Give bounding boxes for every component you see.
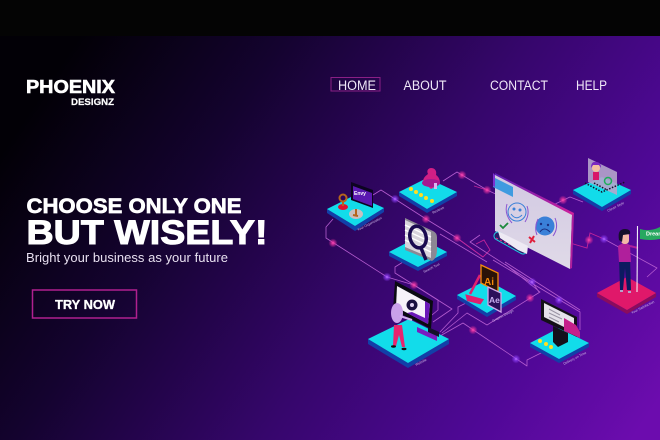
glowing nodes bbox=[328, 170, 608, 364]
icon: sad face bbox=[536, 216, 557, 236]
headline: BUT WISELY! bbox=[26, 214, 268, 252]
logo bbox=[26, 77, 115, 108]
platform: reviews bbox=[399, 168, 457, 215]
platform: clever style bbox=[573, 158, 631, 213]
try now button: TRY NOW bbox=[55, 297, 116, 312]
icon: happy face bbox=[506, 203, 528, 223]
icon: magnifier card bbox=[405, 218, 437, 261]
panel top edge bbox=[495, 173, 574, 217]
icon: delivery monitor bbox=[541, 299, 577, 347]
top black bar bbox=[0, 0, 660, 36]
logo: PHOENIX bbox=[26, 77, 115, 97]
label: Search Tool bbox=[423, 262, 441, 274]
icon: pink arm bbox=[467, 275, 482, 303]
platform: organization bbox=[327, 182, 384, 232]
panel right edge bbox=[570, 213, 574, 269]
navigation: ABOUT bbox=[404, 78, 446, 93]
icon: map pin bbox=[338, 194, 348, 210]
icon: glass profile card bbox=[585, 158, 625, 195]
try now button bbox=[32, 290, 136, 318]
logo: DESIGNZ bbox=[71, 97, 114, 108]
scroll roll bbox=[496, 231, 528, 254]
platform: graphic design bbox=[457, 265, 516, 323]
label: Reviews bbox=[432, 205, 445, 215]
label: Delivery on Time bbox=[563, 351, 587, 366]
icon: illustrator: Ai bbox=[484, 277, 494, 288]
icon: stars bbox=[538, 339, 553, 349]
active nav box bbox=[331, 78, 380, 91]
platform: delivery bbox=[530, 299, 589, 366]
navigation: HOME bbox=[338, 78, 376, 93]
platform: website design bbox=[368, 281, 449, 368]
icon: brand document: Envy bbox=[354, 191, 366, 197]
headline bbox=[26, 194, 268, 252]
platform: search bbox=[389, 218, 447, 274]
label: Graphic Design bbox=[492, 309, 514, 323]
isometric illustration bbox=[326, 158, 660, 368]
label: Your Organization bbox=[357, 216, 383, 232]
navigation bbox=[331, 78, 607, 93]
header tab bbox=[493, 173, 513, 197]
icon: truck bbox=[564, 318, 580, 338]
icon: after effects: Ae bbox=[489, 295, 500, 305]
icon: person bbox=[422, 168, 440, 189]
icon: trophy dish bbox=[349, 209, 363, 219]
headline: CHOOSE ONLY ONE bbox=[26, 194, 242, 218]
navigation: HELP bbox=[576, 78, 607, 93]
icon: check bbox=[500, 223, 508, 228]
icon: five stars bbox=[409, 187, 434, 203]
label: Your Satisfaction bbox=[631, 300, 655, 315]
label: Website bbox=[415, 358, 427, 367]
platform: pink flag bbox=[597, 226, 660, 315]
icon: cross bbox=[529, 236, 535, 243]
icon: monitor bbox=[393, 281, 439, 341]
tagline: Bright your business as your future bbox=[26, 250, 228, 265]
panel face bbox=[495, 175, 572, 269]
label: Clever Style bbox=[607, 201, 625, 213]
icon: woman bbox=[391, 303, 412, 350]
feedback panel bbox=[493, 173, 574, 269]
navigation: CONTACT bbox=[490, 78, 548, 93]
circuit lines bbox=[326, 172, 657, 366]
icon: person with flag bbox=[618, 229, 638, 292]
